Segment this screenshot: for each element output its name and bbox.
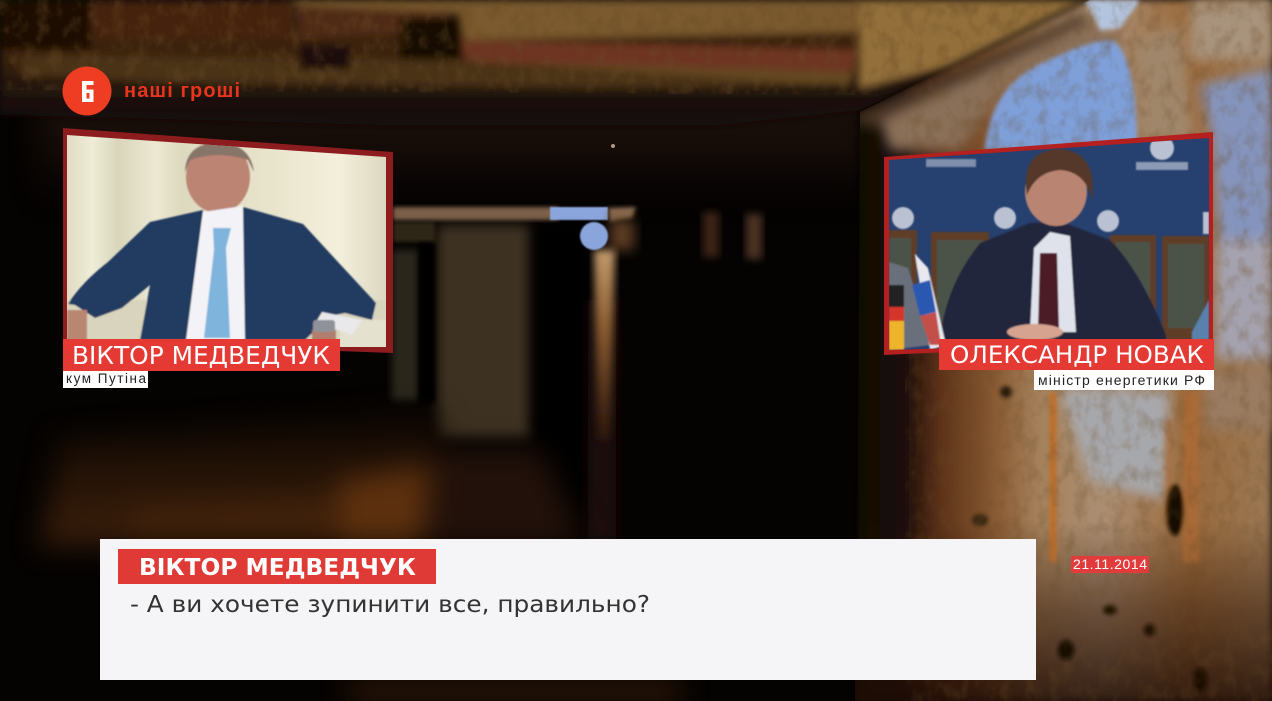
name tag: Oleksandr Novak: ОЛЕКСАНДР НОВАК xyxy=(950,341,1204,369)
logo: round badge with brand xyxy=(62,66,240,116)
caption: energy minister: міністр енергетики РФ xyxy=(1038,372,1205,388)
speaker label xyxy=(118,549,436,584)
portrait illustration: man at a table xyxy=(889,136,1209,350)
background: rust streaks xyxy=(972,386,1207,692)
background: corridor far wall xyxy=(392,222,587,540)
name tag: Viktor Medvedchuk: ВІКТОР МЕДВЕДЧУК xyxy=(72,341,330,370)
icon: logo circle xyxy=(62,66,112,116)
background: tunnel floor xyxy=(40,415,680,701)
panel: quote box xyxy=(100,539,1036,680)
date tag: 21.11.2014 xyxy=(1073,556,1147,572)
background: right wall xyxy=(855,0,1272,701)
speaker label: ВІКТОР МЕДВЕДЧУК xyxy=(139,555,416,581)
logo text: наші гроші xyxy=(124,80,240,102)
background: light strip and glow xyxy=(393,144,762,540)
panel: left portrait xyxy=(63,128,393,353)
background: ceiling xyxy=(0,0,1085,125)
portrait illustration: man in blue suit xyxy=(67,141,387,350)
background: blue opening xyxy=(985,40,1138,150)
quote text: - А ви хочете зупинити все, правильно? xyxy=(130,592,650,618)
panel: right portrait xyxy=(884,132,1213,355)
background: lower ceiling shade xyxy=(40,90,870,200)
caption: Putin's kum: кум Путіна xyxy=(66,371,146,386)
